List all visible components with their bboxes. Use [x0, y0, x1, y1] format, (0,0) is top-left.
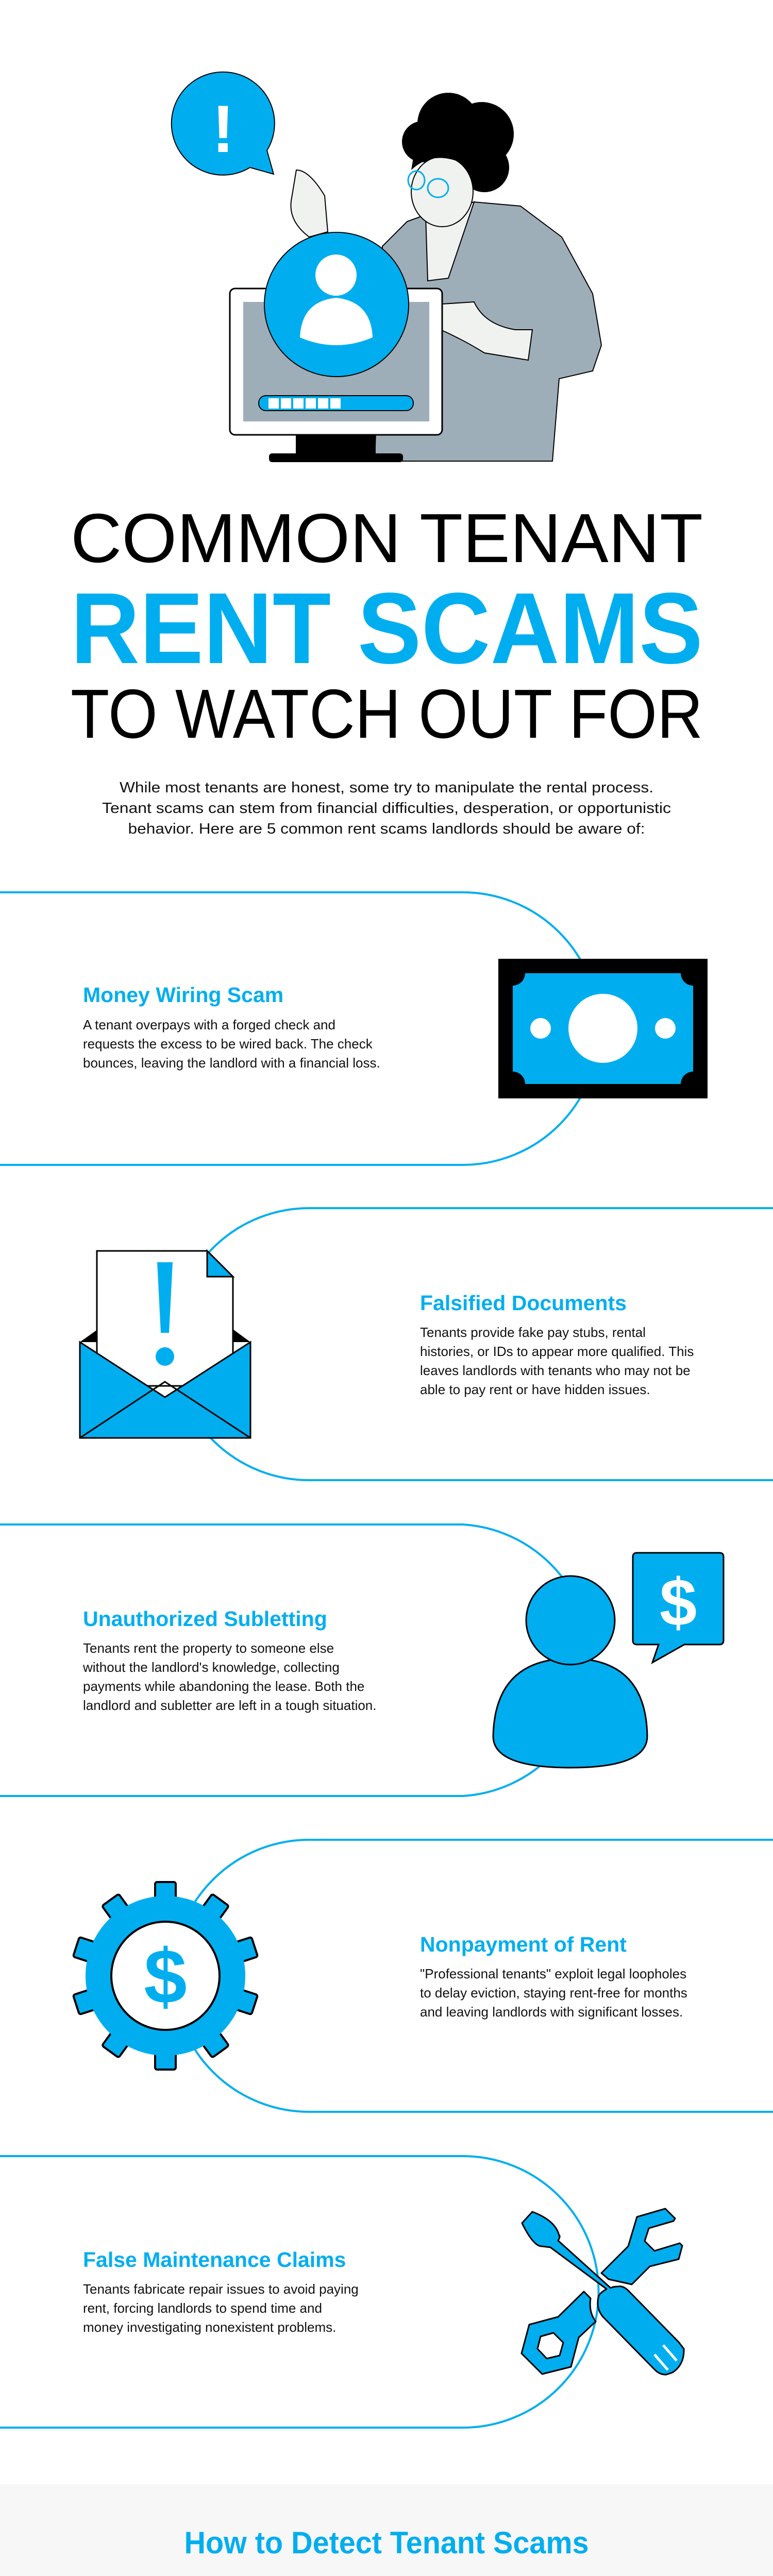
text block: falsified documents: able to pay rent or have hidden issues. — [420, 1382, 650, 1397]
heading: money wiring scam: Money Wiring Scam — [83, 983, 283, 1007]
text block: money wiring — [83, 1017, 380, 1071]
icon: envelope with alert document — [80, 1251, 250, 1438]
text block: nonpayment: to delay eviction, staying rent-free for months — [420, 1985, 687, 2001]
text block: nonpayment: and leaving landlords with significant losses. — [420, 2004, 683, 2020]
panel: how to detect tenant scams — [0, 2484, 773, 2576]
panel: money wiring scam — [0, 892, 708, 1165]
icon: person with dollar bubble: $ — [660, 1565, 697, 1640]
icon: computer monitor — [230, 289, 442, 462]
intro paragraph — [102, 779, 671, 837]
text block: money wiring: requests the excess to be wired back. The check — [83, 1036, 373, 1052]
panel: nonpayment of rent — [73, 1840, 773, 2112]
heading: how to detect: How to Detect Tenant Scams — [184, 2526, 589, 2560]
text block: nonpayment: "Professional tenants" exploit legal loopholes — [420, 1966, 686, 1981]
intro paragraph: Tenant scams can stem from financial difficulties, desperation, or opportunistic — [102, 800, 671, 817]
title: COMMON TENANT — [71, 499, 703, 577]
title: TO WATCH OUT FOR — [71, 675, 703, 753]
hero illustration — [172, 72, 601, 462]
text block: maintenance: Tenants fabricate repair issues to avoid paying — [83, 2281, 359, 2297]
text block: subletting: payments while abandoning the lease. Both the — [83, 1679, 364, 1694]
icon: person with dollar bubble — [493, 1553, 724, 1768]
text block: subletting: without the landlord's knowledge, collecting — [82, 1659, 340, 1675]
text block: money wiring: A tenant overpays with a forged check and — [83, 1017, 335, 1032]
text block: nonpayment — [420, 1966, 687, 2020]
text block: falsified documents: Tenants provide fake pay stubs, rental — [420, 1325, 646, 1340]
text block: falsified documents — [420, 1325, 694, 1397]
heading: unauthorized subletting: Unauthorized Subletting — [83, 1607, 327, 1631]
icon: alert speech bubble: ! — [212, 91, 234, 166]
text block: subletting: landlord and subletter are left in a tough situation. — [83, 1698, 376, 1713]
text block: subletting — [82, 1640, 376, 1713]
panel: false maintenance claims — [0, 2156, 684, 2428]
icon: alert speech bubble — [172, 72, 275, 175]
icon: gear with dollar — [73, 1882, 258, 2070]
icon: money bill — [498, 959, 708, 1098]
intro paragraph: behavior. Here are 5 common rent scams landlords should be aware of: — [128, 821, 645, 837]
heading: falsified documents: Falsified Documents — [420, 1291, 627, 1315]
text block: maintenance: money investigating nonexistent problems. — [83, 2319, 336, 2335]
person illustration — [291, 93, 601, 461]
icon: gear with dollar: $ — [144, 1933, 187, 2020]
text block: falsified documents: leaves landlords with tenants who may not be — [420, 1363, 691, 1378]
heading: false maintenance claims: False Maintenance Claims — [83, 2248, 346, 2272]
text block: money wiring: bounces, leaving the landlord with a financial loss. — [83, 1055, 380, 1071]
title — [71, 499, 703, 753]
text block: falsified documents: histories, or IDs to appear more qualified. This — [420, 1344, 694, 1359]
icon: user profile circle — [264, 232, 409, 377]
icon: crossed tools — [522, 2209, 684, 2375]
panel: falsified documents — [80, 1208, 773, 1480]
heading: nonpayment of rent: Nonpayment of Rent — [420, 1933, 627, 1956]
panel: unauthorized subletting — [0, 1524, 724, 1796]
title: RENT SCAMS — [71, 572, 703, 685]
text block: maintenance — [83, 2281, 359, 2335]
intro paragraph: While most tenants are honest, some try to manipulate the rental process. — [120, 779, 653, 796]
text block: subletting: Tenants rent the property to someone else — [83, 1640, 334, 1656]
text block: maintenance: rent, forcing landlords to spend time and — [83, 2300, 322, 2316]
